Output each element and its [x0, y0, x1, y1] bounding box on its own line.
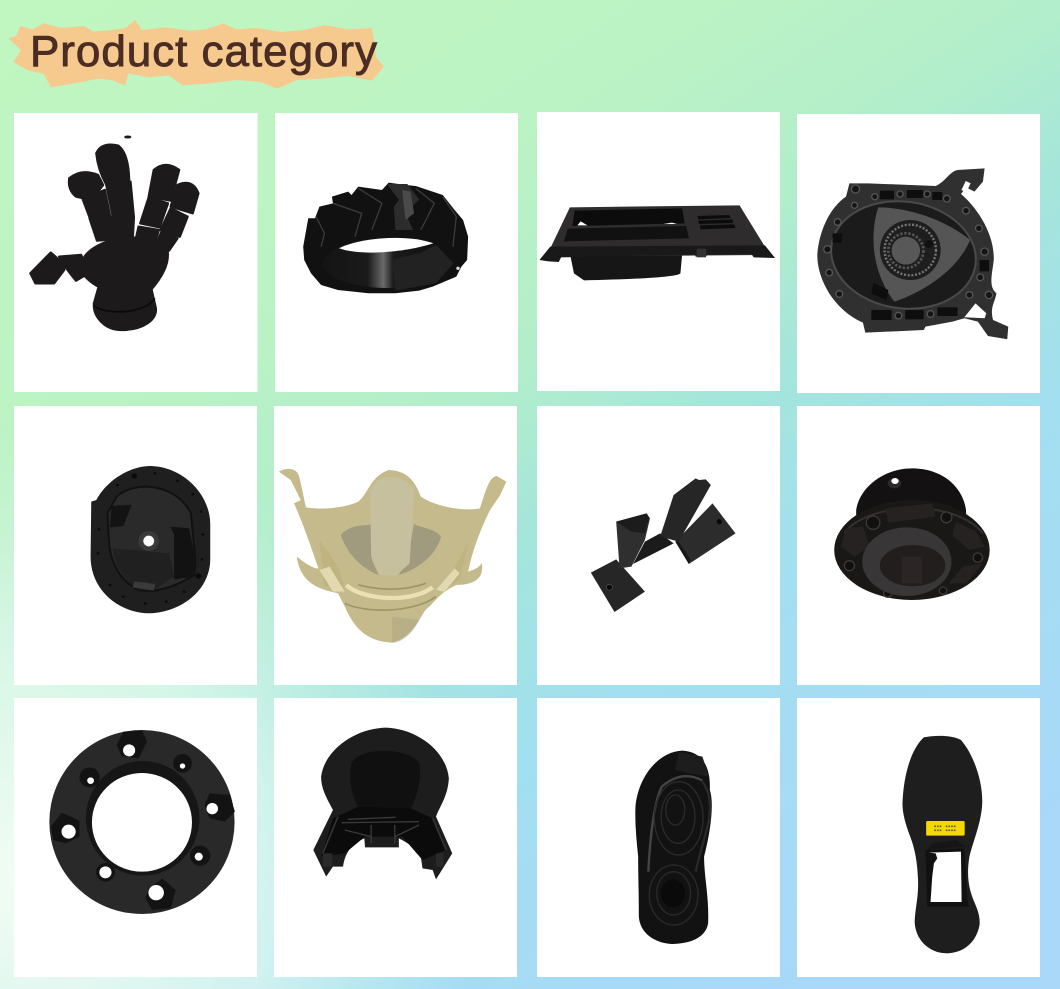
- panel: saddle shell: [274, 698, 517, 977]
- panel: beige mask: [274, 406, 517, 685]
- icon: shoe last: [902, 736, 982, 953]
- icon: flanged hub: [834, 468, 990, 600]
- icon: treaded tire ring: [303, 183, 468, 293]
- panel: tire: [275, 113, 518, 392]
- icon: rotary engine: [817, 168, 1008, 339]
- icon: black sandal: [635, 751, 712, 944]
- title banner: [8, 20, 384, 89]
- panel: bracket: [537, 406, 780, 685]
- panel: hex ring: [14, 698, 257, 977]
- icon: black housing part: [539, 205, 775, 280]
- orange paint splash behind title: [8, 20, 384, 89]
- heading text: Product category: [30, 27, 377, 76]
- icon: black bracket: [591, 478, 736, 612]
- icon: hand model: [30, 137, 198, 330]
- yellow label: [926, 821, 965, 836]
- panel: robotic hand: [14, 113, 258, 392]
- panel: dashboard housing: [537, 112, 780, 391]
- panel: oval cover: [14, 406, 257, 685]
- panel: sandal: [537, 698, 780, 977]
- panel: flange part: [797, 406, 1040, 685]
- icon: black oval cover: [91, 466, 210, 613]
- icon: demon mask: [279, 469, 506, 643]
- panel: rotary engine housing: [797, 114, 1040, 393]
- icon: black shell part: [313, 728, 452, 879]
- panel: shoe last: [797, 698, 1040, 977]
- icon: flange ring with hex pockets: [49, 730, 235, 914]
